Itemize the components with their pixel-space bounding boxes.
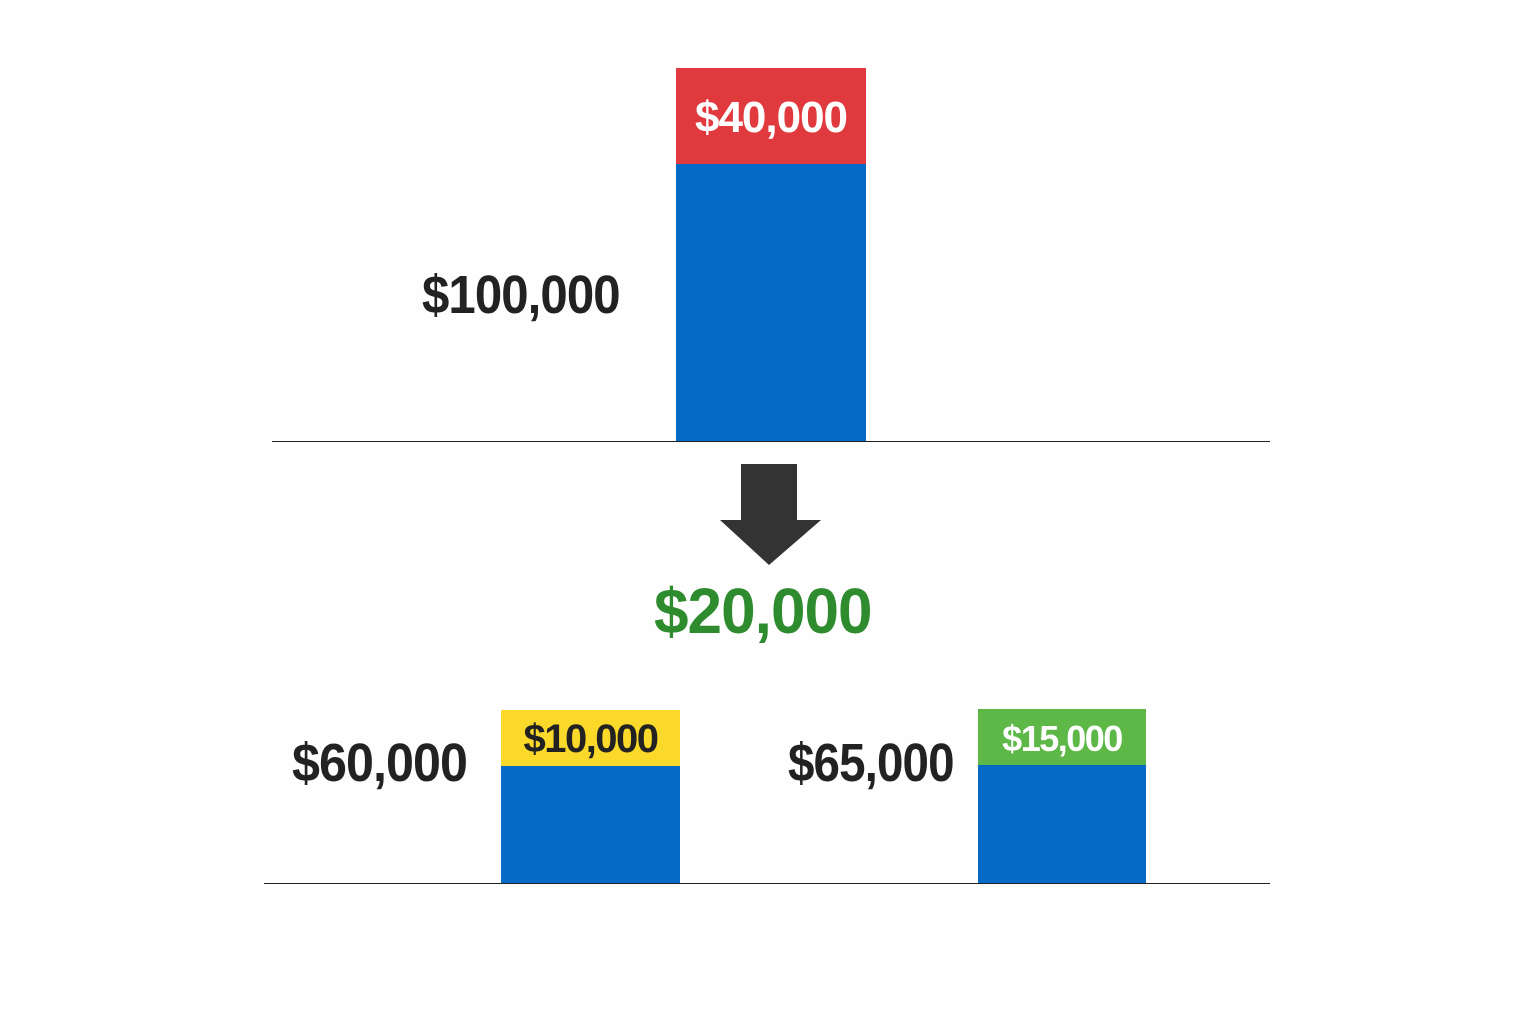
bar: $65,000 [978,709,1146,884]
segment: $10,000 yellow: $10,000 [523,717,658,761]
label: $100,000: $100,000 [422,265,620,325]
label: $60,000: $60,000 [292,733,467,793]
segment: $40,000 red [676,68,866,164]
segment: $15,000 green [978,709,1146,765]
label: $65,000: $65,000 [788,733,954,793]
bar: $100,000 total [676,68,866,442]
bar: $60,000 [501,710,680,884]
segment: $10,000 yellow [501,710,680,766]
bottom bar chart [264,709,1270,884]
segment: $15,000 green: $15,000 [1002,718,1122,759]
arrow: down [720,464,821,565]
top bar chart [272,68,1270,442]
result: $20,000: $20,000 [654,575,872,647]
segment: $40,000 red: $40,000 [695,93,847,142]
